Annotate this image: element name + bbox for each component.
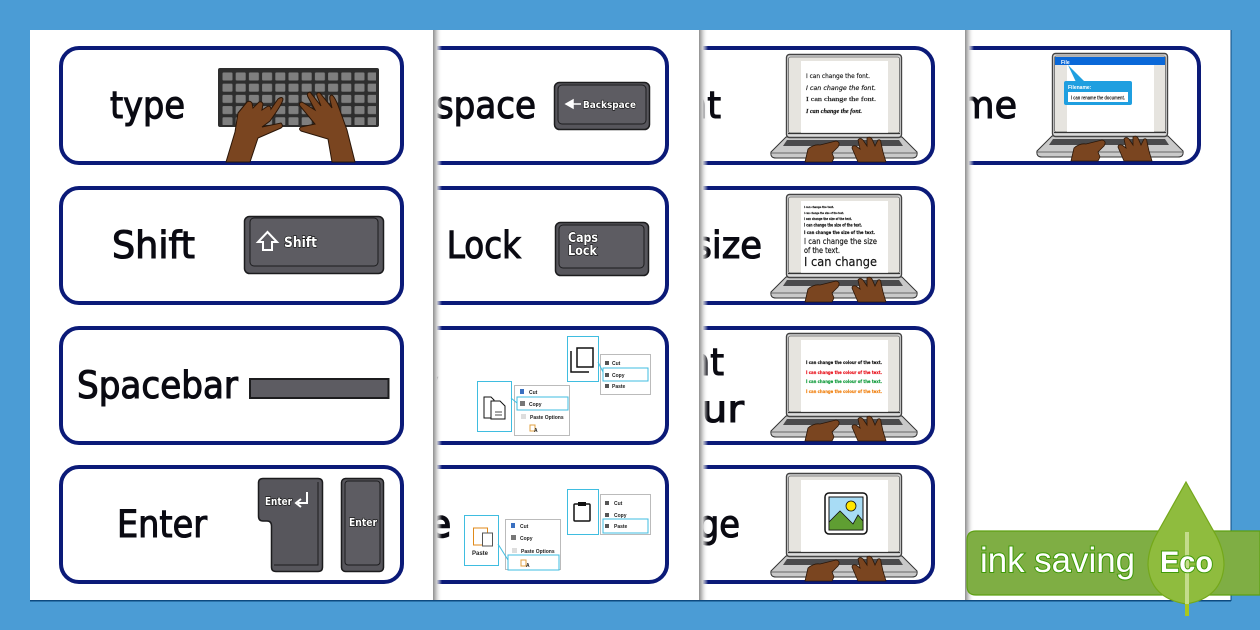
card: font colour [592,328,933,443]
card: rename: rename [877,84,1017,127]
card: copy: Copy [529,402,542,408]
card: font: I can change the font. [805,108,862,115]
icon: spacebar key [250,379,388,398]
card: copy: Cut [529,390,538,396]
badge: ink saving eco [967,482,1260,616]
card: font size: I can change the size of the text. [804,222,862,228]
card: backspace: Backspace [583,100,636,111]
icon: shift key [244,216,384,274]
panel: sheet 1 [30,30,442,602]
card: shift: Shift [112,224,195,267]
card: caps lock: Caps Lock [356,224,522,267]
card: font colour: I can change the colour of the text. [806,379,882,385]
card: font colour: I can change the colour of the text. [806,370,882,376]
card: paste: Paste Options [521,549,555,555]
card: copy: Cut [612,361,621,367]
card: font: I can change the font. [806,84,876,92]
icon: enter keys: Enter [349,517,378,529]
card: font: font [651,84,721,127]
icon: enter keys: Enter [265,496,293,508]
card: font [592,48,933,163]
card: font size: I can change the size of the text. [804,230,875,236]
card: caps lock: Caps [568,231,598,246]
card: copy [326,328,667,443]
card: backspace: Backspace [353,84,536,127]
card: paste [326,467,667,582]
card: font colour: I can change the colour of the text. [806,360,882,366]
card: spacebar [61,328,402,443]
icon: enter keys [258,478,384,572]
card: enter: Enter [117,503,208,546]
card: paste: Copy [614,513,627,519]
card: font size [592,188,933,303]
panel: sheet 4 [827,30,1232,602]
card: paste: Paste [614,524,628,530]
card: copy: A [534,428,538,434]
card: caps lock: Lock [568,244,597,259]
card: spacebar: Spacebar [77,364,239,407]
card: image [592,467,933,582]
card: copy: Copy [612,373,625,379]
card: rename: Filename: [1068,85,1092,91]
card: font size: I can change the size [804,237,877,246]
panel: sheet 2 [295,30,708,602]
card: paste: Paste [472,551,489,557]
card: font: I can change the font. [806,72,870,80]
card: font size: I can change the size of the text. [804,217,852,221]
card: copy: Copy [353,364,438,407]
card: type: type [110,84,185,127]
card: enter [61,467,402,582]
card: paste: A [526,563,530,569]
card: caps lock [326,188,667,303]
card: paste: Cut [614,501,623,507]
card: type [61,48,402,163]
card: rename: I can rename the document. [1071,96,1125,102]
card: font colour: font [654,341,724,384]
card: backspace [326,48,667,163]
card: paste: Cut [520,524,529,530]
icon: shift key: Shift [284,235,317,251]
card: image: image [635,503,740,546]
card: copy: Paste Options [530,415,564,421]
panel: sheet 3 [561,30,974,602]
card: font size: font size [612,224,762,267]
card: font size: of the text. [804,246,840,255]
card: rename: File [1061,60,1070,66]
icon: keyboard with hands [218,68,379,162]
card: font size: I can change the text. [804,205,834,209]
card: shift [61,188,402,303]
badge: ink saving eco: ink saving [980,541,1135,580]
card: rename [858,48,1199,163]
card: font: I can change the font. [806,96,876,103]
card: font size: I can change [804,255,877,269]
card: paste: Paste [356,503,451,546]
card: font size: I can change the size of the text. [804,211,844,215]
card: copy: Paste [612,384,626,390]
icon: leaf drop: Eco [1160,546,1213,579]
card: font colour: I can change the colour of the text. [806,389,882,395]
card: font colour: colour [619,388,745,431]
card: paste: Copy [520,536,533,542]
icon: leaf drop [1148,482,1224,616]
